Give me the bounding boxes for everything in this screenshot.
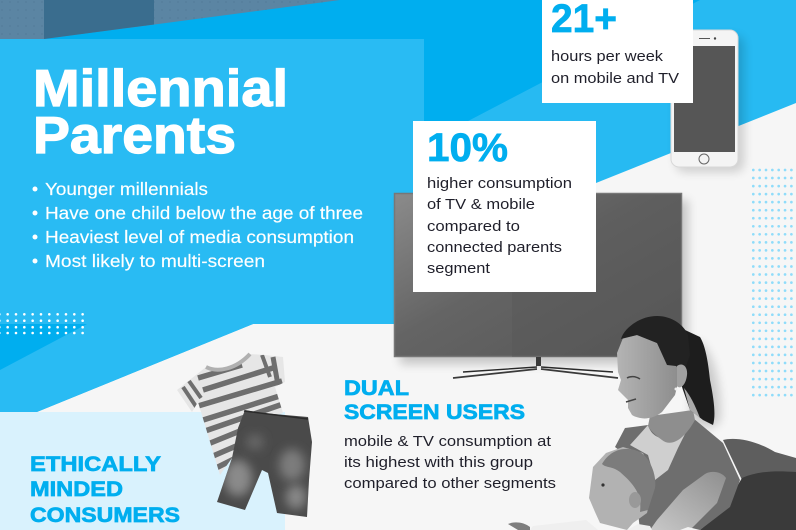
panel: header <box>0 39 424 427</box>
bullet list: Most likely to multi-screen <box>45 251 265 271</box>
heading: ethically minded consumers: CONSUMERS <box>30 504 180 527</box>
icon: television <box>394 194 688 378</box>
text: dual screen description: its highest with this group <box>344 454 533 471</box>
callout: 10%: connected parents <box>427 239 562 256</box>
callout: 21+: on mobile and TV <box>551 70 679 87</box>
icon: denim shorts <box>217 410 312 517</box>
icon: smartphone <box>671 30 744 172</box>
heading: dual screen users: DUAL <box>344 377 409 400</box>
bullet list: Younger millennials <box>45 179 208 199</box>
callout: 10%: higher consumption <box>427 175 572 192</box>
panel: ethically minded <box>0 412 285 530</box>
text: dual screen description: mobile & TV consumption at <box>344 433 552 450</box>
white dot grid <box>0 314 85 333</box>
heading: ethically minded consumers: ETHICALLY <box>30 453 161 476</box>
heading: dual screen users: SCREEN USERS <box>344 401 525 424</box>
heading: ethically minded consumers <box>30 453 180 527</box>
decorative corner triangle <box>0 324 87 370</box>
title <box>33 60 288 165</box>
icon: striped shirt <box>177 354 286 475</box>
callout: 10% <box>413 121 596 292</box>
callout: 21+ <box>542 0 693 103</box>
title: Parents <box>33 107 236 165</box>
callout: 10%: segment <box>427 260 491 277</box>
callout: 10%: compared to <box>427 218 520 235</box>
top-left grey band <box>0 0 340 39</box>
callout: 21+: hours per week <box>551 48 664 65</box>
bullet list: Heaviest level of media consumption <box>45 227 354 247</box>
text: dual screen description: compared to other segments <box>344 475 556 492</box>
heading: dual screen users <box>344 377 525 424</box>
heading: ethically minded consumers: MINDED <box>30 478 123 501</box>
text: dual screen description <box>344 433 556 492</box>
photo: mother and baby <box>508 316 740 530</box>
callout: 10%: of TV & mobile <box>427 196 535 213</box>
dot grid right <box>753 170 793 395</box>
bullet list <box>32 179 363 271</box>
bullet list: Have one child below the age of three <box>45 203 363 223</box>
callout: 10%: 10% <box>427 126 508 170</box>
sofa <box>700 439 796 530</box>
title: Millennial <box>33 60 288 118</box>
